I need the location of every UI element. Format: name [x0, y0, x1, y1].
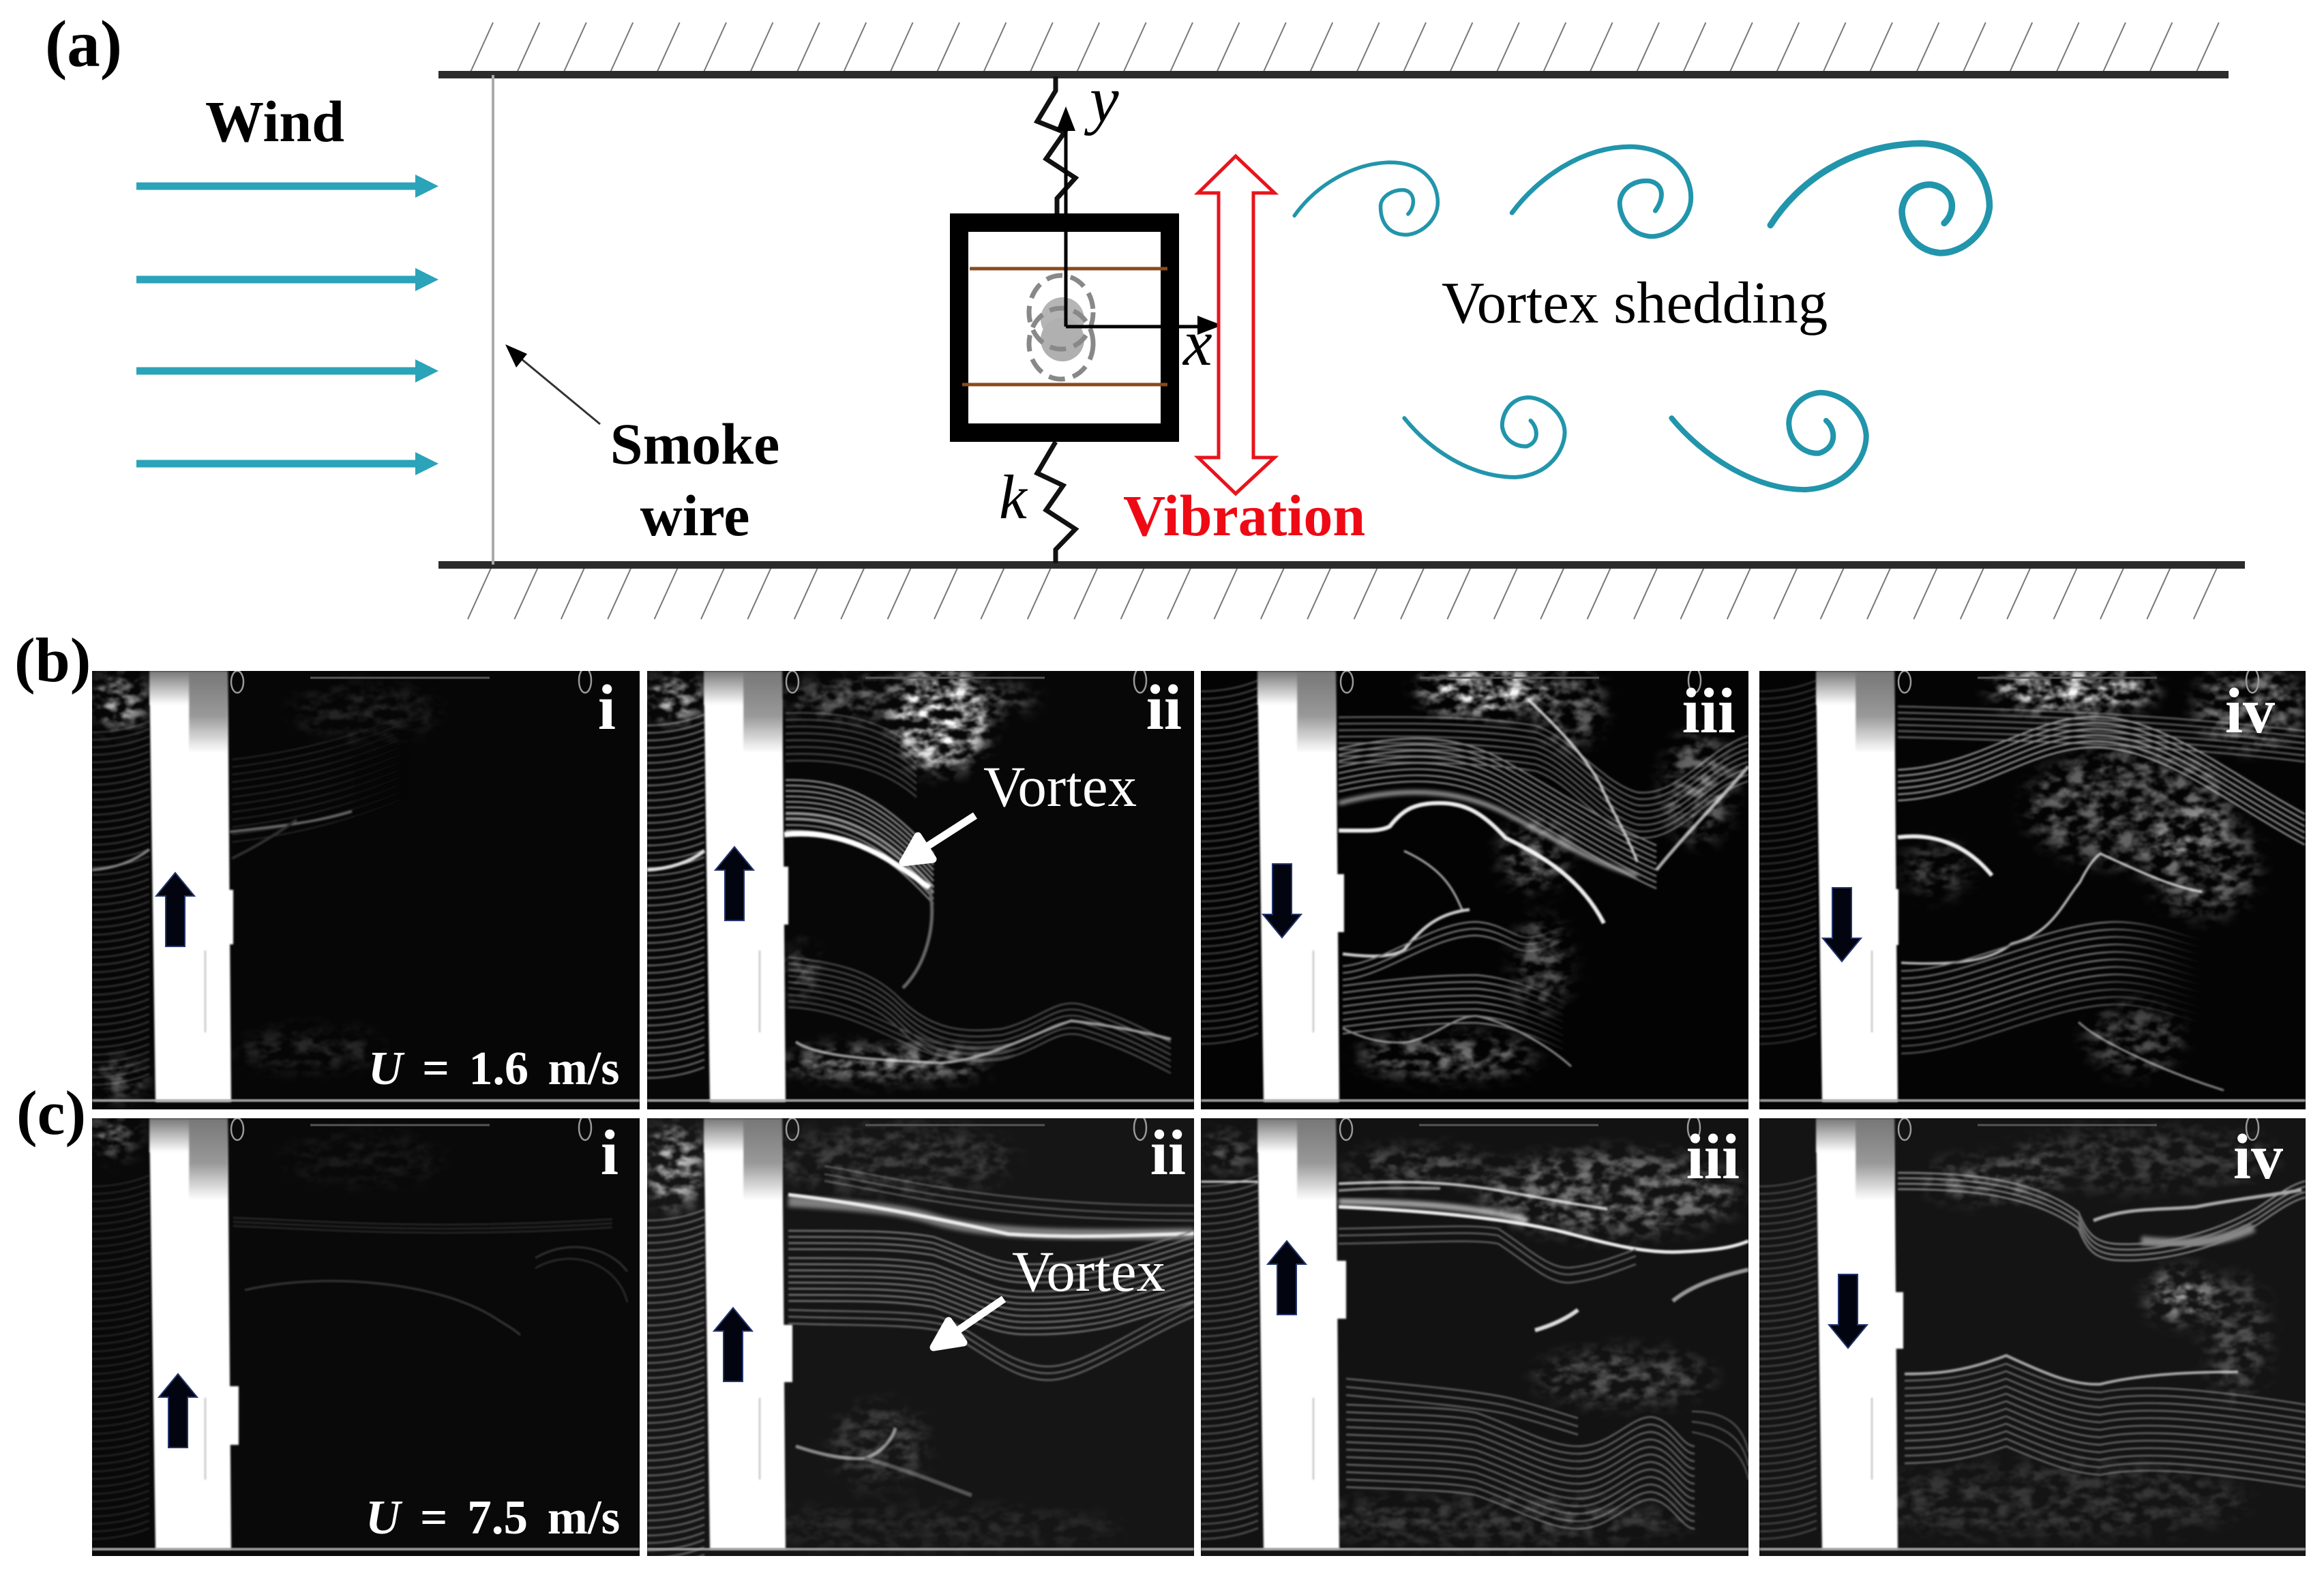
label: y: y	[1084, 63, 1119, 136]
label: (a): (a)	[45, 8, 122, 80]
label: iv: iv	[2233, 1122, 2283, 1193]
arrow: pointer to vortex	[903, 816, 975, 863]
sphere support column	[1257, 671, 1344, 1102]
arrow: vibration double-headed	[1198, 156, 1275, 494]
spring: upper	[1037, 76, 1075, 213]
sphere support column	[1816, 1118, 1903, 1549]
sphere support column	[704, 1118, 792, 1549]
top wall with hatching	[438, 23, 2229, 78]
arrow: down	[1823, 888, 1861, 961]
axes x and y	[1056, 106, 1222, 335]
panel: (a) wind tunnel schematic	[45, 8, 2245, 619]
label: Smoke wire: Smoke	[610, 411, 779, 477]
smoke traces	[1358, 664, 1733, 1077]
streamlines	[647, 1166, 1194, 1571]
streamlines	[92, 1176, 627, 1539]
streamlines	[1759, 680, 2305, 1090]
smoke traces	[1201, 1132, 1740, 1544]
label: iii: iii	[1682, 676, 1735, 747]
smoke traces	[646, 668, 1036, 1078]
arrow: down	[1263, 864, 1301, 938]
panel: c-i smoke image	[92, 1118, 640, 1556]
label: (b): (b)	[14, 625, 91, 695]
label: iv: iv	[2225, 676, 2275, 747]
panel: b-iii smoke image	[1201, 671, 1748, 1109]
smoke traces	[88, 1116, 447, 1186]
smoke traces	[92, 674, 440, 1099]
sphere support column	[1816, 671, 1898, 1102]
streamlines	[1759, 1173, 2306, 1539]
arrow: pointer to smoke wire	[505, 344, 600, 424]
streamlines	[1201, 680, 1748, 1066]
label: ii: ii	[1150, 1118, 1186, 1188]
cylinder motion: dashed circles and grey body	[1029, 275, 1093, 379]
label: i: i	[598, 672, 616, 743]
panel: c-iv smoke image	[1759, 1118, 2306, 1556]
arrow: up	[159, 1374, 197, 1448]
label: (c): (c)	[16, 1078, 86, 1148]
panel: b-ii smoke image	[647, 671, 1194, 1109]
panel: c-iii smoke image	[1201, 1118, 1748, 1556]
heading: Wind: Wind	[205, 89, 344, 154]
sphere support column	[149, 1118, 239, 1549]
label: Vortex: Vortex	[1012, 1240, 1165, 1304]
label: Vibration: Vibration	[1123, 483, 1365, 548]
sphere support column	[704, 671, 788, 1102]
arrow: pointer to vortex	[934, 1299, 1004, 1347]
icon: wind arrows	[136, 175, 438, 475]
label: i: i	[601, 1118, 619, 1188]
panel: b-iv smoke image	[1759, 671, 2306, 1109]
sphere support column	[149, 671, 233, 1102]
panel: c-ii smoke image	[647, 1118, 1194, 1556]
label: x: x	[1182, 306, 1212, 379]
arrow: up	[1268, 1241, 1306, 1315]
smoke traces	[1903, 664, 2305, 1073]
label: wind speed: U = 7.5 m/s	[366, 1491, 620, 1544]
panel: b-i smoke image	[92, 671, 640, 1109]
sphere support column	[1257, 1118, 1346, 1549]
arrow: down	[1829, 1274, 1867, 1348]
streamlines	[92, 712, 413, 1085]
label: iii: iii	[1686, 1122, 1740, 1193]
spring: lower, k	[1037, 442, 1075, 563]
label: Smoke wire: wire	[640, 483, 749, 548]
arrow: up	[714, 1308, 752, 1381]
smoke wire line	[492, 75, 494, 565]
smoke traces	[1841, 1128, 2278, 1538]
label: Vortex shedding: Vortex shedding	[1442, 269, 1828, 335]
label: Vortex: Vortex	[983, 755, 1137, 819]
label: ii: ii	[1146, 672, 1182, 743]
label: wind speed: U = 1.6 m/s	[368, 1043, 619, 1095]
bottom wall with hatching	[438, 561, 2245, 619]
streamlines	[647, 713, 1171, 1078]
arrow: up	[715, 847, 754, 921]
streamlines	[1201, 1176, 1748, 1539]
frame box with brown wires	[959, 222, 1170, 432]
arrow: up	[156, 873, 194, 946]
icon: vortices	[1294, 143, 1990, 490]
smoke traces	[644, 1125, 1124, 1548]
label: k: k	[999, 462, 1028, 532]
